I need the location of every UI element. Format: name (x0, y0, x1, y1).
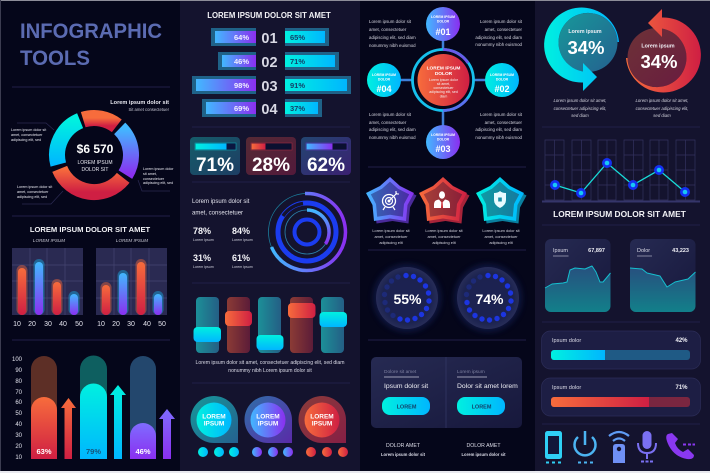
bar 46% (130, 356, 156, 459)
bottom labels: DOLOR AMET (466, 443, 501, 449)
hub side text blocks: Lorem ipsum dolor sit (480, 19, 523, 24)
diverging bars: 69% (234, 104, 249, 113)
progress panel 42% (542, 331, 700, 369)
pin dots (198, 447, 348, 457)
hub side text blocks: adipiscing elit, sed diam (475, 127, 522, 132)
donut callouts: Lorem ipsum dolor sit (110, 100, 169, 106)
title: INFOGRAPHIC (20, 20, 162, 43)
donut chart: $6 570 (57, 118, 131, 192)
dotted gauge 55% (373, 264, 441, 332)
left card content: Dolore sit amet (384, 369, 417, 375)
hub center circle (418, 54, 470, 106)
dotted gauge 74% (454, 264, 522, 332)
icon: remote with wifi (609, 432, 629, 463)
arrow red (61, 398, 76, 459)
donut callouts: adipiscing elit, sed (143, 181, 173, 185)
bar 46%: 46% (135, 447, 151, 456)
stat card 71%: 71% (196, 155, 234, 176)
star captions: adipiscing elit (432, 240, 457, 245)
pin badge purple: IPSUM (258, 420, 278, 428)
text block with percent stats: 78% (193, 226, 211, 236)
donut callouts: Lorem ipsum dolor sit (11, 128, 46, 132)
stat card 62% (301, 137, 351, 176)
hub side text blocks: Lorem ipsum dolor sit (369, 112, 412, 117)
icon: smartphone (545, 431, 562, 462)
diverging bars: 98% (234, 81, 249, 90)
cylinder caption (196, 360, 344, 374)
left card content: LOREM (397, 404, 417, 410)
y axis labels: 30 (15, 433, 23, 439)
progress panel 71% (542, 378, 700, 416)
line chart points (550, 158, 690, 198)
bar chart right: LOREM IPSUM (116, 238, 148, 243)
node #01: #01 (435, 27, 451, 37)
node #01: LOREM IPSUM (431, 15, 455, 19)
heading: column 2: LOREM IPSUM DOLOR SIT AMET (207, 11, 331, 20)
node #03: DOLOR (437, 138, 450, 142)
hub side text blocks: Lorem ipsum dolor sit (480, 112, 523, 117)
area card Dolor: Dolor (637, 248, 650, 254)
icon: person (434, 191, 450, 208)
bar 79%: 79% (86, 447, 101, 456)
text block with percent stats: Lorem ipsum dolor sit (192, 199, 250, 205)
bottom labels: Lorem ipsum dolor sit (381, 452, 426, 457)
hub side text blocks: amet, consectetuer (485, 27, 523, 32)
text block with percent stats: 61% (232, 253, 250, 263)
hub center circle: consectetuer (433, 86, 454, 90)
y axis labels: 80 (15, 379, 23, 385)
bar chart right (96, 238, 167, 328)
bar chart left: 50 (75, 321, 83, 328)
bar 79% (80, 356, 107, 459)
donut callouts: adipiscing elit, sed (11, 138, 41, 142)
pin badge purple (244, 396, 292, 443)
title: TOOLS (20, 47, 90, 70)
donut segment: left cyan (57, 121, 80, 165)
circular arrow 34% red: 34% (640, 51, 678, 72)
progress panel 42%: 42% (675, 338, 688, 344)
hub side text blocks: adipiscing elit, sed diam (475, 35, 522, 40)
y axis labels: 70 (15, 390, 23, 396)
right card content (457, 369, 518, 415)
diverging bars: 46% (234, 57, 249, 66)
hub ring (412, 50, 474, 111)
donut callouts: Lorem ipsum dolor (143, 167, 174, 171)
circular arrow captions: Lorem ipsum dolor sit amet, (635, 98, 689, 103)
star captions: adipiscing elit (379, 240, 404, 245)
hub side text blocks: amet, consectetuer (369, 120, 407, 125)
donut callouts: Lorem ipsum dolor sit (17, 185, 52, 189)
star captions: adipiscing elit (489, 240, 514, 245)
donut center value: LOREM IPSUM (77, 160, 113, 166)
progress panel 71%: Ipsum dolor (552, 385, 581, 391)
node #04: #04 (376, 84, 392, 94)
panel: two button card (371, 357, 522, 428)
star captions: Lorem ipsum dolor sit (372, 228, 411, 233)
node #04 (367, 63, 401, 97)
stat card 71% (190, 137, 240, 176)
hub center circle: adipiscing elit, sed (429, 90, 458, 94)
hub center circle: diam (440, 94, 447, 98)
line chart (542, 140, 700, 202)
circular arrow 34% red (626, 9, 701, 92)
node #04: DOLOR (378, 78, 391, 82)
donut callouts (11, 100, 174, 204)
area card Dolor (630, 239, 696, 312)
text block with percent stats: Lorem ipsum (193, 238, 214, 242)
arrow purple (159, 409, 175, 459)
circular arrow 34% cyan: 34% (567, 37, 605, 58)
diverging bars: 65% (290, 33, 305, 42)
dotted gauge 55%: 55% (393, 291, 422, 307)
node #01 (426, 7, 460, 41)
donut callouts: adipiscing elit, sed (17, 195, 47, 199)
donut callouts: amet, consectetuer (17, 190, 49, 194)
donut callouts: sit amet, (143, 172, 157, 176)
icon: telephone (666, 433, 695, 459)
area card Ipsum (545, 239, 610, 312)
text block with percent stats: Lorem ipsum (232, 265, 253, 269)
hub side text blocks: nonummy nibh euismod (475, 42, 523, 47)
star captions (372, 228, 521, 245)
pin badge teal (190, 396, 238, 443)
row numbers: 03 (261, 79, 278, 95)
bar chart right: 30 (127, 321, 135, 328)
node #03: #03 (435, 144, 451, 154)
icon: target (382, 191, 399, 210)
bar chart left: 30 (44, 321, 52, 328)
star badge: target (366, 177, 416, 224)
y axis labels: 10 (15, 455, 23, 461)
bar chart right: 40 (143, 321, 151, 328)
star captions: amet, consectetuer (427, 234, 461, 239)
progress panel 71%: 71% (675, 385, 688, 391)
node #01: DOLOR (437, 20, 450, 24)
right card content: LOREM (472, 404, 492, 410)
area card Ipsum: Ipsum (553, 248, 568, 254)
arrow cyan (110, 385, 126, 459)
hub side text blocks: nonummy nibh euismod (475, 135, 523, 140)
donut callouts: consectetuer (143, 177, 165, 181)
text block with percent stats: 31% (193, 253, 211, 263)
text block with percent stats: amet, consectetuer (192, 210, 243, 216)
stat card 28%: 28% (252, 155, 290, 176)
y axis labels: 20 (15, 444, 23, 450)
star captions: amet, consectetuer (484, 234, 518, 239)
y axis labels: 90 (15, 368, 23, 374)
stat card 28% (246, 137, 296, 176)
donut segment: right blue (120, 128, 131, 175)
circular arrow captions: Lorem ipsum dolor sit amet, (553, 98, 607, 103)
pin badge red: IPSUM (312, 420, 332, 428)
node #02: LOREM IPSUM (490, 73, 514, 77)
diverging bars: 37% (290, 104, 305, 113)
hub center circle: Lorem ipsum dolor (429, 78, 459, 82)
diverging bars: 64% (234, 33, 249, 42)
pin badge red (298, 396, 346, 443)
text block with percent stats: Lorem ipsum (232, 238, 253, 242)
circular arrow captions: consectetuer adipiscing elit, (636, 106, 688, 111)
stat card 62%: 62% (307, 155, 345, 176)
bottom labels: DOLOR AMET (386, 443, 421, 449)
bottom labels: Lorem ipsum dolor sit (462, 452, 506, 457)
circular arrow 34% cyan (544, 8, 619, 91)
row numbers (261, 31, 278, 118)
bar chart left: LOREM IPSUM (33, 238, 65, 243)
pin badge teal: IPSUM (204, 420, 224, 428)
node #03: LOREM IPSUM (431, 133, 455, 137)
left card content: Ipsum dolor sit (384, 383, 428, 390)
donut segment: bottom red (60, 169, 123, 192)
cylinder caption: Lorem ipsum dolor sit amet, consectetuer adipiscing elit, sed diam (196, 360, 344, 366)
star badge: person (419, 177, 470, 224)
circular arrow captions: consectetuer adipiscing elit, (554, 106, 606, 111)
hub side text blocks: nonummy nibh euismod (369, 135, 416, 140)
pin badge teal: LOREM (202, 414, 226, 420)
y axis labels: 100 (12, 357, 23, 363)
arrow bar chart (12, 356, 175, 461)
hub side text blocks: Lorem ipsum dolor sit (369, 19, 412, 24)
hub center circle: LOREM IPSUM (427, 66, 460, 72)
row numbers: 04 (261, 102, 278, 118)
bar chart left: 40 (59, 321, 67, 328)
hub side text blocks: amet, consectetuer (369, 27, 407, 32)
bar chart left: 10 (13, 321, 21, 328)
star badge: shield (476, 177, 526, 224)
row numbers: 02 (261, 55, 278, 71)
circular arrow captions (553, 98, 689, 118)
diverging bars (192, 28, 351, 118)
circular arrow captions: sed diam (653, 113, 671, 118)
donut center value: $6 570 (77, 142, 114, 156)
donut center value: DOLOR SIT (82, 167, 108, 173)
hub center circle: sit amet, (437, 82, 450, 86)
icon: power (574, 431, 596, 462)
area card Dolor: 43,223 (672, 248, 689, 254)
pin badge purple: LOREM (256, 414, 280, 420)
radial ring chart (268, 193, 346, 270)
donut center value (77, 142, 114, 173)
heading: line chart: LOREM IPSUM DOLOR SIT AMET (553, 209, 687, 219)
area card Ipsum: 67,897 (588, 248, 605, 254)
icon: shield (494, 191, 506, 208)
cylinder sliders (194, 297, 347, 353)
donut callouts: Sit amet consectetuer (128, 107, 170, 112)
heading: column 1 charts: LOREM IPSUM DOLOR SIT AMET (30, 225, 151, 234)
right card content: Lorem ipsum (457, 369, 485, 375)
donut callouts: amet, consectetuer (11, 133, 43, 137)
dotted gauge 74%: 74% (475, 291, 504, 307)
row numbers: 01 (261, 31, 278, 47)
circular arrow 34% red: Lorem ipsum (641, 44, 675, 50)
y axis labels: 60 (15, 400, 23, 406)
icon: microphone (638, 431, 656, 462)
right card content: Dolor sit amet lorem (457, 383, 518, 390)
hub center circle: DOLOR (435, 71, 453, 77)
pin badge red: LOREM (310, 414, 334, 420)
y axis labels: 50 (15, 411, 23, 417)
node #03 (426, 125, 460, 159)
bar chart right: 20 (112, 321, 120, 328)
text block with percent stats: Lorem ipsum (193, 265, 214, 269)
progress panel 42%: Ipsum dolor (552, 338, 581, 344)
node #04: LOREM IPSUM (372, 73, 396, 77)
node #02: #02 (494, 84, 510, 94)
hub side text blocks: adipiscing elit, sed diam (369, 35, 416, 40)
donut segment: top red (83, 118, 117, 126)
hub side text blocks: nonummy nibh euismod (369, 43, 416, 48)
cylinder caption: nonummy nibh Lorem ipsum dolor sit (228, 368, 312, 374)
bar chart right: 10 (97, 321, 105, 328)
hub side text blocks: amet, consectetuer (485, 120, 523, 125)
bar 63% (31, 356, 57, 459)
diverging bars: 91% (290, 81, 305, 90)
bar chart left (12, 238, 83, 328)
hub side text blocks: adipiscing elit, sed diam (369, 127, 416, 132)
text block with percent stats: 84% (232, 226, 250, 236)
bottom labels (381, 443, 506, 457)
node #02 (485, 63, 519, 97)
bar chart right: 50 (158, 321, 166, 328)
y axis labels: 40 (15, 422, 23, 428)
circular arrow captions: sed diam (571, 113, 589, 118)
bar chart left: 20 (28, 321, 36, 328)
y axis labels (12, 357, 23, 461)
star captions: Lorem ipsum dolor sit (425, 228, 464, 233)
left card content (382, 369, 430, 415)
diverging bars: 71% (290, 57, 305, 66)
bar 63%: 63% (36, 447, 52, 456)
star captions: amet, consectetuer (374, 234, 408, 239)
star captions: Lorem ipsum dolor sit (482, 228, 521, 233)
node #02: DOLOR (496, 78, 509, 82)
title (20, 20, 162, 70)
hub side text blocks (369, 19, 523, 140)
text block with percent stats (192, 199, 253, 269)
hub diagram (367, 7, 519, 159)
circular arrow 34% cyan: Lorem ipsum (568, 29, 602, 35)
